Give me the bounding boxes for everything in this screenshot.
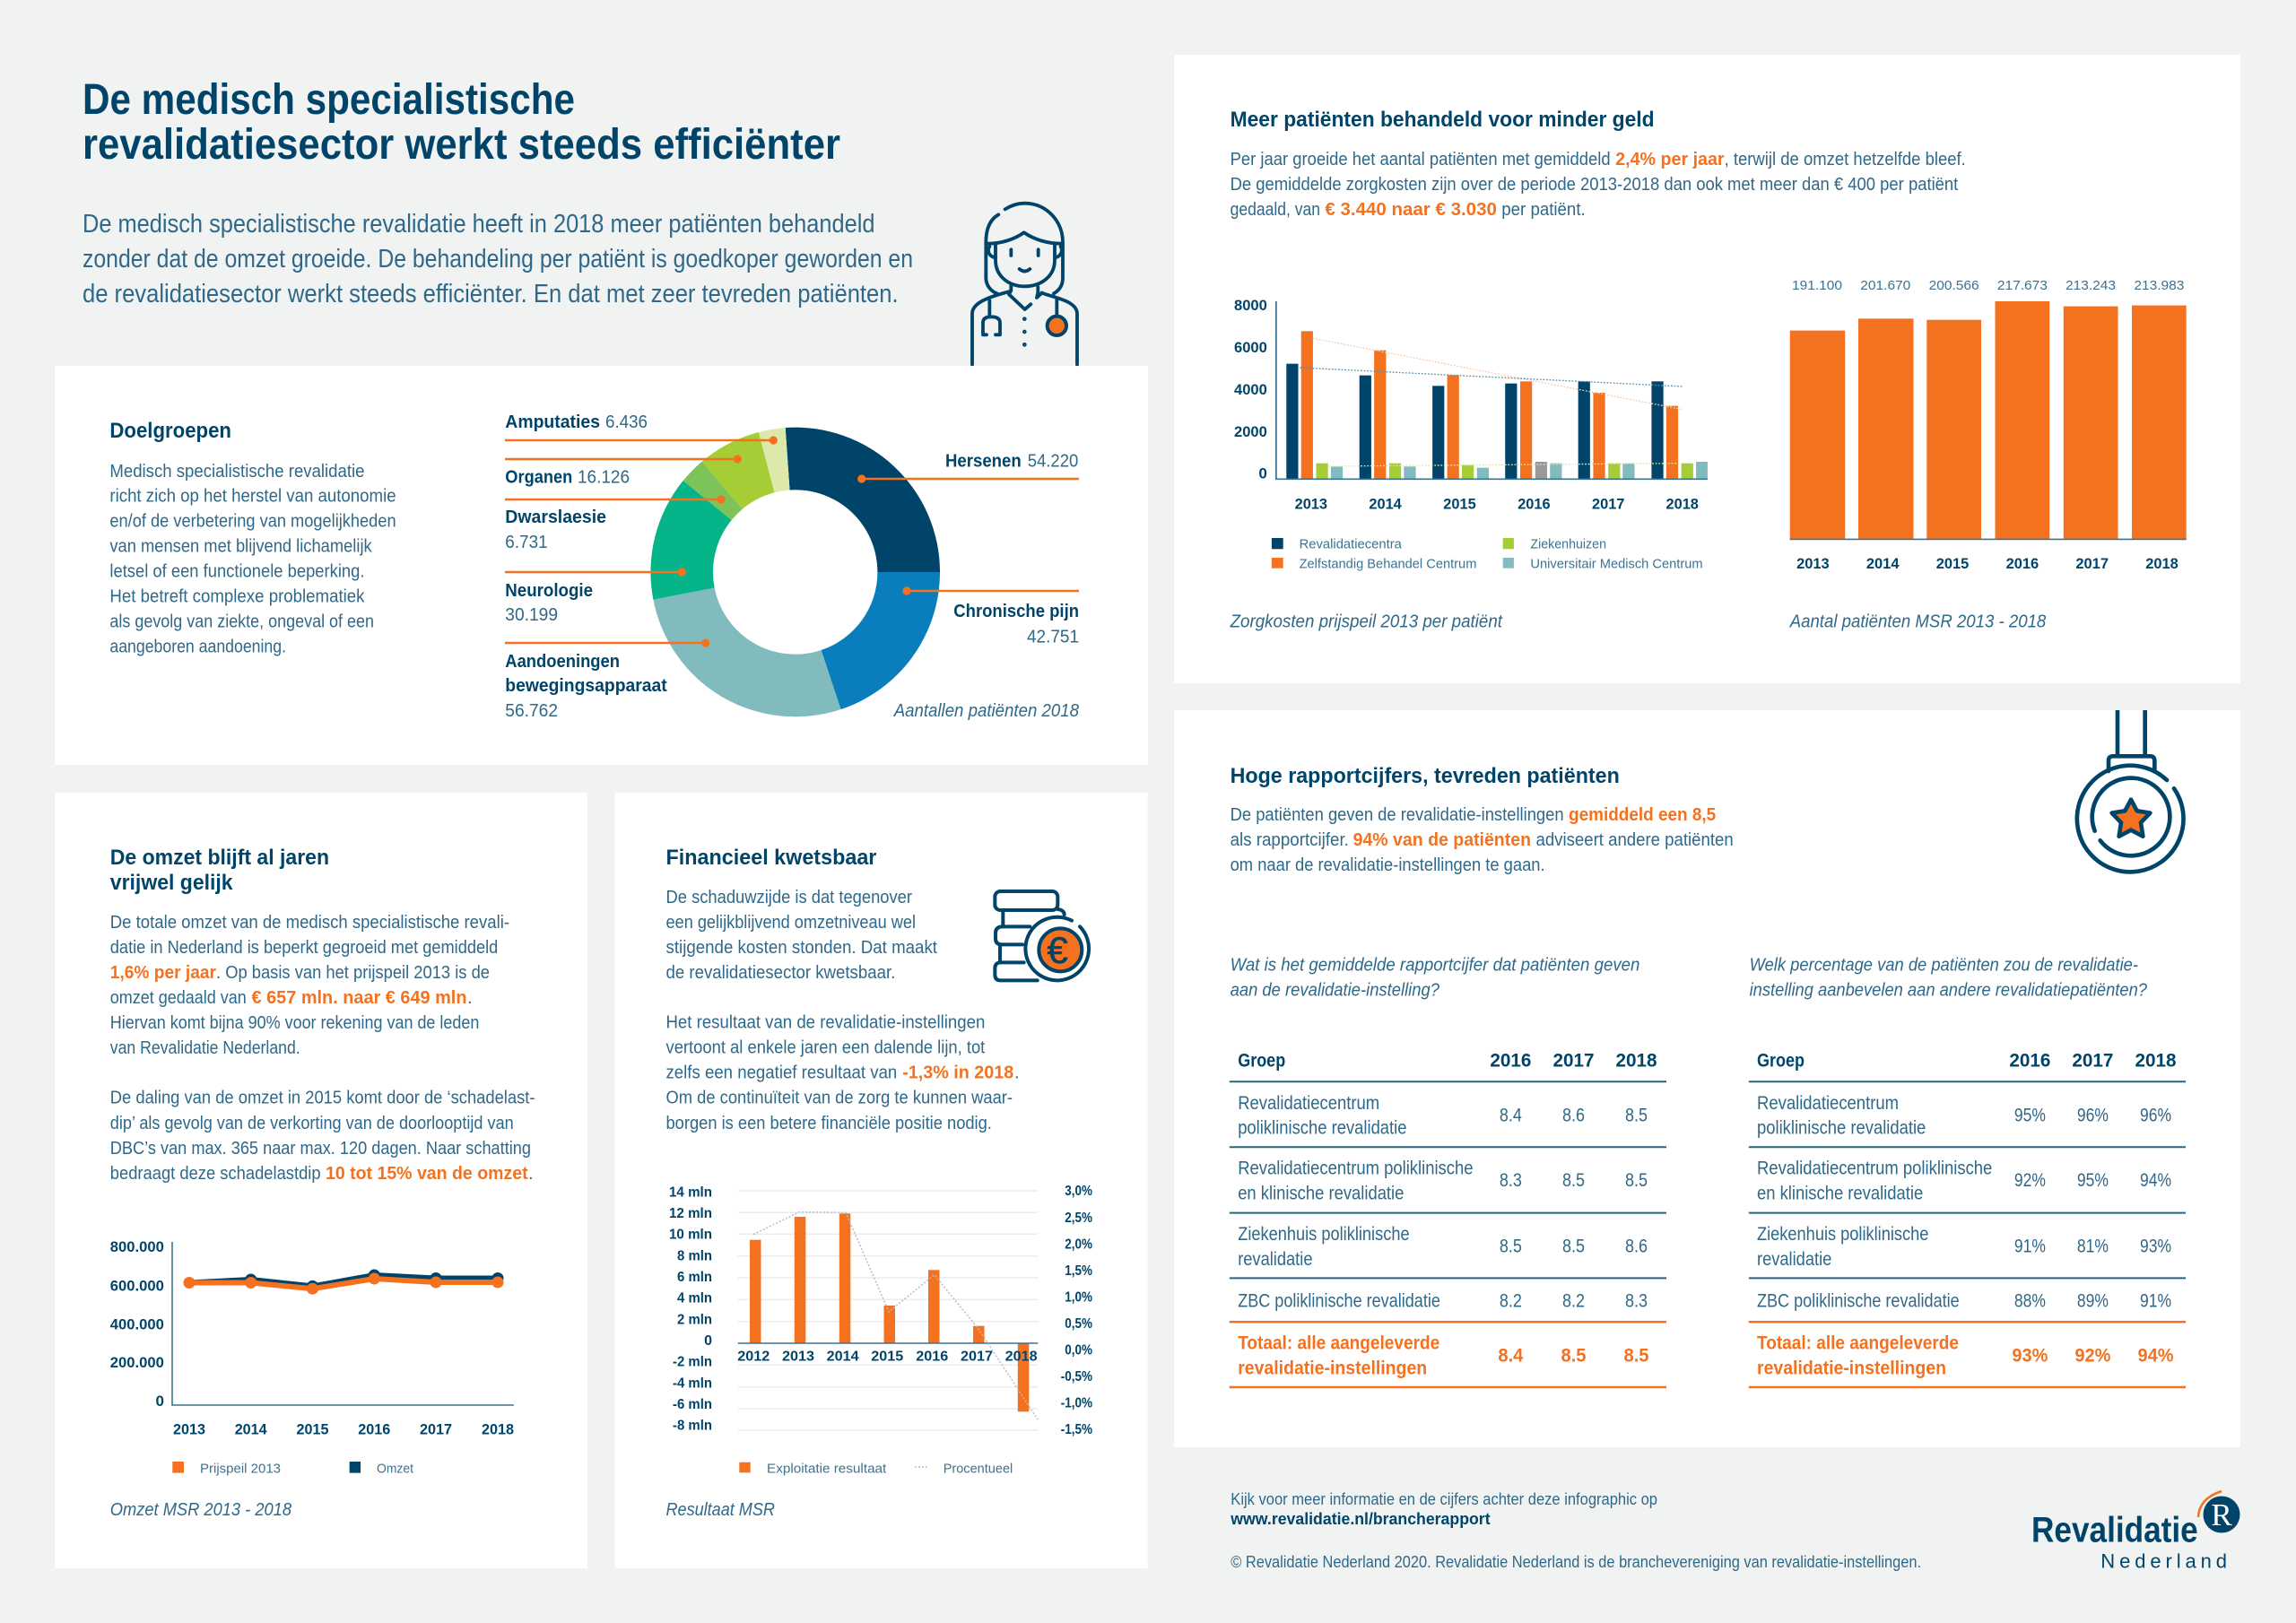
text block: doelgroepen: Het betreft complexe problematiek bbox=[109, 586, 365, 606]
text block: omzet: dip’ als gevolg van de verkorting van de doorlooptijd van bbox=[110, 1114, 514, 1133]
bar chart: resultaat: 1,5% bbox=[1065, 1263, 1092, 1279]
question: aanbevelen bbox=[1750, 956, 2148, 1001]
table: rapportcijfers: 8.5 bbox=[1561, 1346, 1587, 1367]
bar chart: zorgkosten: 2018 bbox=[1666, 495, 1699, 512]
text block: omzet: Hiervan komt bijna 90% voor rekening van de leden bbox=[110, 1013, 479, 1033]
donut label: organen bbox=[505, 468, 630, 488]
text block: rapportcijfers: adviseert andere patiënten bbox=[1535, 830, 1734, 850]
table: rapportcijfers: 8.5 bbox=[1500, 1236, 1522, 1257]
donut label: aandoeningen bbox=[505, 652, 667, 721]
donut label: neurologie: 30.199 bbox=[505, 605, 558, 625]
panel: omzet bbox=[55, 793, 587, 1568]
footer text: www.revalidatie.nl/brancherapport bbox=[1230, 1510, 1491, 1528]
caption: aantal patiënten: Aantal patiënten MSR 2013 - 2018 bbox=[1789, 612, 2046, 632]
line chart: omzet bbox=[110, 1238, 514, 1437]
bar chart: resultaat: -6 mln bbox=[673, 1397, 712, 1412]
question: rapportcijfer bbox=[1231, 956, 1639, 1001]
table: aanbevelen: 2017 bbox=[2072, 1051, 2113, 1072]
text block: doelgroepen: als gevolg van ziekte, ongeval of een bbox=[109, 612, 374, 631]
text block: omzet: € 657 mln. naar € 649 mln bbox=[251, 988, 466, 1008]
text block: omzet bbox=[110, 913, 535, 1184]
text block: rapportcijfers: 94% van de patiënten bbox=[1353, 830, 1531, 850]
line chart: omzet: 2017 bbox=[420, 1420, 452, 1437]
table: aanbevelen: 91% bbox=[2140, 1291, 2171, 1312]
table: rapportcijfers: 8.5 bbox=[1625, 1170, 1648, 1191]
table: rapportcijfers: 8.2 bbox=[1500, 1291, 1522, 1312]
line chart: omzet: 2016 bbox=[358, 1420, 390, 1437]
legend: zorgkosten: Ziekenhuizen bbox=[1530, 537, 1606, 552]
line chart: omzet: 0 bbox=[156, 1393, 164, 1410]
table: aanbevelen: 93% bbox=[2140, 1236, 2171, 1257]
bar chart: resultaat: 0 bbox=[704, 1333, 712, 1349]
legend: omzet: Omzet bbox=[377, 1462, 414, 1476]
legend: resultaat: Exploitatie resultaat bbox=[767, 1462, 887, 1476]
donut label: dwarslaesie: Dwarslaesie bbox=[505, 508, 606, 527]
panel: doelgroepen bbox=[55, 366, 1148, 765]
text block: financieel: stijgende kosten stonden. Dat maakt bbox=[665, 938, 937, 958]
heading: doelgroepen: Doelgroepen bbox=[109, 419, 231, 443]
bar chart: resultaat: 12 mln bbox=[669, 1206, 712, 1221]
donut label: dwarslaesie bbox=[505, 508, 606, 552]
bar chart: aantal patiënten: 2014 bbox=[1866, 555, 1900, 572]
heading: omzet: De omzet blijft al jaren bbox=[110, 846, 329, 870]
table: aanbevelen: Totaal: alle aangeleverde bbox=[1757, 1333, 1959, 1354]
caption: zorgkosten: Zorgkosten prijspeil 2013 per patiënt bbox=[1230, 612, 1503, 632]
table: rapportcijfers: poliklinische revalidatie bbox=[1238, 1118, 1406, 1139]
bar chart: resultaat: -8 mln bbox=[673, 1419, 712, 1434]
bar chart: resultaat: 2014 bbox=[827, 1349, 859, 1364]
question: aanbevelen: Welk percentage van de patiënten zou de revalidatie- bbox=[1750, 956, 2138, 976]
donut label: aandoeningen: 56.762 bbox=[505, 701, 558, 721]
text block: doelgroepen: aangeboren aandoening. bbox=[109, 637, 286, 656]
text block: meer patiënten: Per jaar groeide het aantal patiënten met gemiddeld bbox=[1231, 150, 1611, 169]
panel: rapportcijfers bbox=[1174, 710, 2240, 1447]
bar chart: aantal patiënten: 201.670 bbox=[1860, 278, 1910, 293]
table: aanbevelen: 81% bbox=[2077, 1236, 2109, 1257]
legend: zorgkosten bbox=[1272, 537, 1703, 571]
legend: resultaat: Procentueel bbox=[944, 1462, 1013, 1476]
table: rapportcijfers: 8.4 bbox=[1498, 1346, 1524, 1367]
table: rapportcijfers: 8.4 bbox=[1500, 1105, 1522, 1125]
logo: Revalidatie Nederland: Revalidatie bbox=[2031, 1510, 2198, 1549]
table: aanbevelen: 2018 bbox=[2135, 1051, 2177, 1072]
table: aanbevelen: Revalidatiecentrum bbox=[1757, 1093, 1899, 1114]
text block: meer patiënten bbox=[1231, 150, 1966, 220]
table: aanbevelen: 92% bbox=[2014, 1170, 2046, 1191]
icon: euro sign: € bbox=[1047, 929, 1068, 971]
table: rapportcijfers: 2017 bbox=[1553, 1051, 1595, 1072]
bar chart: resultaat: 2017 bbox=[961, 1349, 993, 1364]
text block: meer patiënten: € 3.440 naar € 3.030 bbox=[1325, 200, 1497, 220]
bar chart: zorgkosten: 0 bbox=[1258, 464, 1267, 482]
bar chart: resultaat: 6 mln bbox=[677, 1270, 712, 1285]
table: aanbevelen: 89% bbox=[2077, 1291, 2109, 1312]
donut label: hersenen bbox=[945, 452, 1078, 472]
intro text: De medisch specialistische revalidatie heeft in 2018 meer patiënten behandeld bbox=[83, 210, 875, 239]
icon: doctor bbox=[972, 204, 1077, 365]
table: aanbevelen: Ziekenhuis poliklinische bbox=[1757, 1224, 1928, 1245]
table: rapportcijfers: revalidatie bbox=[1238, 1249, 1313, 1270]
legend: omzet: Prijspeil 2013 bbox=[200, 1462, 281, 1476]
text block: rapportcijfers bbox=[1231, 805, 1734, 875]
bar chart: resultaat: -2 mln bbox=[673, 1355, 712, 1370]
panel: financieel bbox=[615, 793, 1148, 1568]
text block: rapportcijfers: gemiddeld een 8,5 bbox=[1569, 805, 1716, 825]
line chart: omzet: 2018 bbox=[482, 1420, 514, 1437]
table: aanbevelen: 2016 bbox=[2009, 1051, 2050, 1072]
text block: omzet: 1,6% per jaar bbox=[110, 963, 216, 983]
text block: doelgroepen: richt zich op het herstel van autonomie bbox=[109, 486, 396, 506]
footer text: © Revalidatie Nederland 2020. Revalidatie Nederland is de branchevereniging van revalidatie-instellingen. bbox=[1231, 1553, 1921, 1571]
bar chart: zorgkosten: 8000 bbox=[1234, 297, 1267, 314]
table: aanbevelen: 94% bbox=[2138, 1346, 2174, 1367]
bar chart: resultaat: -0,5% bbox=[1061, 1369, 1092, 1384]
bar chart: aantal patiënten bbox=[1790, 278, 2187, 572]
text block: meer patiënten: per patiënt. bbox=[1501, 200, 1586, 220]
table: rapportcijfers: ZBC poliklinische revalidatie bbox=[1238, 1291, 1440, 1312]
table: aanbevelen: en klinische revalidatie bbox=[1757, 1184, 1923, 1204]
table: rapportcijfers: 2018 bbox=[1616, 1051, 1657, 1072]
intro text bbox=[83, 210, 913, 308]
donut label: amputaties: Amputaties bbox=[505, 412, 600, 432]
text block: omzet: . Op basis van het prijspeil 2013 is de bbox=[216, 963, 490, 983]
text block: rapportcijfers: als rapportcijfer. bbox=[1231, 830, 1349, 850]
table: aanbevelen: 96% bbox=[2077, 1105, 2109, 1125]
table: aanbevelen: revalidatie-instellingen bbox=[1757, 1358, 1946, 1379]
text block: financieel: . bbox=[1014, 1063, 1020, 1083]
text block: financieel: borgen is een betere financiële positie nodig. bbox=[665, 1114, 992, 1133]
donut label: amputaties bbox=[505, 412, 648, 432]
donut label: chronische pijn: 42.751 bbox=[1027, 628, 1079, 647]
text block: omzet: . bbox=[528, 1164, 534, 1184]
bar chart: zorgkosten: 4000 bbox=[1234, 381, 1267, 398]
logo: Revalidatie Nederland: Nederland bbox=[2100, 1549, 2227, 1572]
table: aanbevelen: Revalidatiecentrum poliklinische bbox=[1757, 1159, 1992, 1179]
text block: meer patiënten: gedaald, van bbox=[1231, 200, 1320, 220]
pointer lines bbox=[505, 436, 1079, 647]
bar chart: resultaat: 2013 bbox=[782, 1349, 814, 1364]
text block: omzet: bedraagt deze schadelastdip bbox=[110, 1164, 321, 1184]
bar chart: resultaat: 2016 bbox=[916, 1349, 948, 1364]
table: aanbevelen: revalidatie bbox=[1757, 1249, 1831, 1270]
table: rapportcijfers: 8.5 bbox=[1562, 1170, 1585, 1191]
bar chart: resultaat: 2,0% bbox=[1065, 1237, 1092, 1252]
bar chart: aantal patiënten: 2017 bbox=[2075, 555, 2109, 572]
line chart: omzet: 400.000 bbox=[110, 1316, 164, 1333]
text block: meer patiënten: , terwijl de omzet hetzelfde bleef. bbox=[1725, 150, 1966, 169]
donut label: organen: 16.126 bbox=[578, 468, 630, 488]
text block: omzet: . bbox=[467, 988, 473, 1008]
donut label: amputaties: 6.436 bbox=[605, 412, 648, 432]
bar chart: zorgkosten: 2013 bbox=[1295, 495, 1327, 512]
table: aanbevelen: Groep bbox=[1757, 1051, 1805, 1072]
text block: financieel: Om de continuïteit van de zorg te kunnen waar- bbox=[665, 1089, 1013, 1108]
bar chart: aantal patiënten: 217.673 bbox=[1997, 278, 2048, 293]
intro text: de revalidatiesector werkt steeds efficiënter. En dat met zeer tevreden patiënten. bbox=[83, 280, 899, 308]
bar chart: aantal patiënten: 2015 bbox=[1936, 555, 1969, 572]
donut label: chronische pijn: Chronische pijn bbox=[953, 602, 1079, 621]
bar chart: resultaat: 14 mln bbox=[669, 1185, 712, 1200]
text block: doelgroepen: letsel of een functionele beperking. bbox=[109, 561, 365, 581]
logo: Revalidatie Nederland: R bbox=[2211, 1497, 2232, 1532]
table: rapportcijfers: 8.6 bbox=[1562, 1105, 1585, 1125]
bar chart: zorgkosten: 2017 bbox=[1592, 495, 1624, 512]
line chart: omzet: 600.000 bbox=[110, 1277, 164, 1295]
line chart: omzet: 800.000 bbox=[110, 1238, 164, 1255]
table: rapportcijfers: 8.5 bbox=[1623, 1346, 1649, 1367]
table: rapportcijfers: 8.2 bbox=[1562, 1291, 1585, 1312]
table: rapportcijfers: Revalidatiecentrum bbox=[1238, 1093, 1379, 1114]
bar chart: resultaat: 10 mln bbox=[669, 1228, 712, 1243]
table: aanbevelen: 88% bbox=[2014, 1291, 2046, 1312]
table: aanbevelen: 92% bbox=[2074, 1346, 2111, 1367]
bar chart: resultaat: 2015 bbox=[871, 1349, 903, 1364]
title bbox=[83, 76, 840, 169]
question: rapportcijfer: aan de revalidatie-instelling? bbox=[1231, 981, 1440, 1001]
text block: financieel: De schaduwzijde is dat tegenover bbox=[665, 888, 912, 907]
text block: doelgroepen: en/of de verbetering van mogelijkheden bbox=[109, 511, 396, 531]
bar chart: aantal patiënten: 2018 bbox=[2145, 555, 2179, 572]
line chart: omzet: 2014 bbox=[235, 1420, 267, 1437]
question: rapportcijfer: Wat is het gemiddelde rapportcijfer dat patiënten geven bbox=[1231, 956, 1639, 976]
donut label: hersenen: 54.220 bbox=[1028, 452, 1078, 472]
text block: omzet: omzet gedaald van bbox=[110, 988, 247, 1008]
table: aanbevelen bbox=[1749, 1051, 2186, 1387]
text block: omzet: 10 tot 15% van de omzet bbox=[326, 1164, 528, 1184]
line chart: omzet: 2015 bbox=[296, 1420, 328, 1437]
table: rapportcijfers: 8.5 bbox=[1562, 1236, 1585, 1257]
donut label: neurologie bbox=[505, 581, 593, 625]
footer text bbox=[1230, 1490, 1921, 1571]
question: aanbevelen: instelling aanbevelen aan andere revalidatiepatiënten? bbox=[1750, 981, 2148, 1001]
heading: omzet bbox=[110, 846, 329, 895]
donut label: hersenen: Hersenen bbox=[945, 452, 1022, 472]
text block: meer patiënten: De gemiddelde zorgkosten zijn over de periode 2013-2018 dan ook met meer dan € 400 per patiënt bbox=[1231, 175, 1959, 195]
donut label: aandoeningen: bewegingsapparaat bbox=[505, 676, 667, 696]
line chart: omzet: 200.000 bbox=[110, 1354, 164, 1371]
text block: financieel bbox=[665, 888, 1020, 1133]
bar chart: resultaat: 1,0% bbox=[1065, 1289, 1092, 1305]
bar chart: resultaat: 3,0% bbox=[1065, 1184, 1092, 1199]
bar chart: resultaat: 2012 bbox=[737, 1349, 770, 1364]
bar chart: resultaat: 2,5% bbox=[1065, 1211, 1092, 1226]
legend: omzet bbox=[172, 1462, 414, 1476]
text block: financieel: zelfs een negatief resultaat van bbox=[665, 1063, 897, 1083]
text block: omzet: van Revalidatie Nederland. bbox=[110, 1038, 300, 1058]
legend: resultaat bbox=[739, 1462, 1013, 1476]
text block: financieel: vertoont al enkele jaren een dalende lijn, tot bbox=[665, 1038, 986, 1058]
heading: financieel: Financieel kwetsbaar bbox=[665, 846, 876, 870]
icon: medal bbox=[2077, 710, 2184, 872]
table: rapportcijfers: Totaal: alle aangeleverde bbox=[1238, 1333, 1439, 1354]
bar chart: aantal patiënten: 191.100 bbox=[1792, 278, 1842, 293]
text block: doelgroepen: van mensen met blijvend lichamelijk bbox=[109, 536, 373, 556]
intro text: zonder dat de omzet groeide. De behandeling per patiënt is goedkoper geworden en bbox=[83, 245, 913, 273]
bar chart: resultaat: 2 mln bbox=[677, 1312, 712, 1327]
table: aanbevelen: 91% bbox=[2014, 1236, 2046, 1257]
bar chart: resultaat: 0,0% bbox=[1065, 1342, 1092, 1358]
heading: meer patiënten: Meer patiënten behandeld voor minder geld bbox=[1231, 108, 1655, 132]
text block: financieel: Het resultaat van de revalidatie-instellingen bbox=[665, 1013, 985, 1033]
donut label: neurologie: Neurologie bbox=[505, 581, 593, 601]
text block: omzet: De totale omzet van de medisch specialistische revali- bbox=[110, 913, 509, 933]
bar chart: aantal patiënten: 200.566 bbox=[1929, 278, 1979, 293]
table: rapportcijfers: 8.3 bbox=[1625, 1291, 1648, 1312]
caption: aantallen patiënten: Aantallen patiënten 2018 bbox=[893, 701, 1079, 721]
donut label: aandoeningen: Aandoeningen bbox=[505, 652, 620, 672]
bar chart: zorgkosten: 2016 bbox=[1518, 495, 1551, 512]
table: aanbevelen: 96% bbox=[2140, 1105, 2171, 1125]
table: rapportcijfers: Groep bbox=[1238, 1051, 1285, 1072]
table: aanbevelen: ZBC poliklinische revalidatie bbox=[1757, 1291, 1960, 1312]
text block: financieel: de revalidatiesector kwetsbaar. bbox=[665, 963, 895, 983]
bar chart: aantal patiënten: 213.243 bbox=[2066, 278, 2116, 293]
text block: rapportcijfers: De patiënten geven de revalidatie-instellingen bbox=[1231, 805, 1564, 825]
bar chart: zorgkosten: 6000 bbox=[1234, 339, 1267, 356]
bar chart: resultaat: -1,5% bbox=[1061, 1422, 1092, 1437]
table: aanbevelen: 95% bbox=[2077, 1170, 2109, 1191]
table: rapportcijfers: revalidatie-instellingen bbox=[1238, 1358, 1427, 1379]
logo: Revalidatie Nederland bbox=[2031, 1491, 2240, 1572]
bar chart: resultaat: 0,5% bbox=[1065, 1316, 1092, 1332]
caption: omzet: Omzet MSR 2013 - 2018 bbox=[110, 1500, 291, 1520]
table: rapportcijfers: 8.3 bbox=[1500, 1170, 1522, 1191]
footer text: Kijk voor meer informatie en de cijfers achter deze infographic op bbox=[1231, 1490, 1657, 1508]
title: revalidatiesector werkt steeds efficiënter bbox=[83, 121, 840, 169]
bar chart: zorgkosten: 2014 bbox=[1369, 495, 1402, 512]
bar chart: aantal patiënten: 213.983 bbox=[2134, 278, 2184, 293]
legend: zorgkosten: Universitair Medisch Centrum bbox=[1530, 556, 1703, 571]
bar chart: resultaat: -4 mln bbox=[673, 1376, 712, 1391]
bar chart: resultaat bbox=[669, 1184, 1092, 1437]
bar chart: zorgkosten: 2000 bbox=[1234, 423, 1267, 440]
table: rapportcijfers: 2016 bbox=[1490, 1051, 1531, 1072]
table: aanbevelen: 93% bbox=[2012, 1346, 2048, 1367]
text block: rapportcijfers: om naar de revalidatie-instellingen te gaan. bbox=[1231, 855, 1545, 875]
line chart: omzet: 2013 bbox=[173, 1420, 205, 1437]
bar chart: aantal patiënten: 2016 bbox=[2006, 555, 2039, 572]
donut chart bbox=[650, 428, 940, 716]
table: aanbevelen: 94% bbox=[2140, 1170, 2171, 1191]
donut label: chronische pijn bbox=[953, 602, 1079, 647]
table: rapportcijfers: 8.5 bbox=[1625, 1105, 1648, 1125]
table: rapportcijfers: Revalidatiecentrum poliklinische bbox=[1238, 1159, 1473, 1179]
bar chart: zorgkosten: 2015 bbox=[1443, 495, 1476, 512]
text block: meer patiënten: 2,4% per jaar bbox=[1615, 150, 1725, 169]
bar chart: zorgkosten bbox=[1234, 297, 1708, 512]
text block: omzet: datie in Nederland is beperkt gegroeid met gemiddeld bbox=[110, 938, 498, 958]
text block: doelgroepen bbox=[109, 462, 396, 656]
heading: omzet: vrijwel gelijk bbox=[110, 871, 233, 895]
table: rapportcijfers: en klinische revalidatie bbox=[1238, 1184, 1404, 1204]
title: De medisch specialistische bbox=[83, 76, 575, 124]
bar chart: resultaat: 2018 bbox=[1005, 1349, 1038, 1364]
legend: zorgkosten: Zelfstandig Behandel Centrum bbox=[1300, 556, 1476, 571]
bar chart: resultaat: -1,0% bbox=[1061, 1395, 1092, 1410]
table: rapportcijfers: 8.6 bbox=[1625, 1236, 1648, 1257]
table: aanbevelen: 95% bbox=[2014, 1105, 2046, 1125]
table: rapportcijfers: Ziekenhuis poliklinische bbox=[1238, 1224, 1410, 1245]
table: aanbevelen: poliklinische revalidatie bbox=[1757, 1118, 1926, 1139]
icon: coins bbox=[995, 891, 1089, 980]
text block: omzet: DBC’s van max. 365 naar max. 120 dagen. Naar schatting bbox=[110, 1139, 531, 1159]
bar chart: resultaat: 4 mln bbox=[677, 1291, 712, 1306]
text block: financieel: -1,3% in 2018 bbox=[902, 1063, 1013, 1083]
text block: doelgroepen: Medisch specialistische revalidatie bbox=[109, 462, 365, 482]
heading: rapportcijfers: Hoge rapportcijfers, tevreden patiënten bbox=[1231, 764, 1620, 788]
bar chart: aantal patiënten: 2013 bbox=[1796, 555, 1830, 572]
text block: financieel: een gelijkblijvend omzetniveau wel bbox=[665, 913, 916, 933]
donut label: dwarslaesie: 6.731 bbox=[505, 533, 548, 552]
bar chart: resultaat: 8 mln bbox=[677, 1248, 712, 1263]
table: rapportcijfers bbox=[1230, 1051, 1666, 1387]
text block: omzet: De daling van de omzet in 2015 komt door de ‘schadelast- bbox=[110, 1089, 535, 1108]
donut label: organen: Organen bbox=[505, 468, 572, 488]
panel: meer patiënten bbox=[1174, 55, 2240, 683]
legend: zorgkosten: Revalidatiecentra bbox=[1300, 537, 1403, 552]
caption: resultaat: Resultaat MSR bbox=[665, 1500, 775, 1520]
